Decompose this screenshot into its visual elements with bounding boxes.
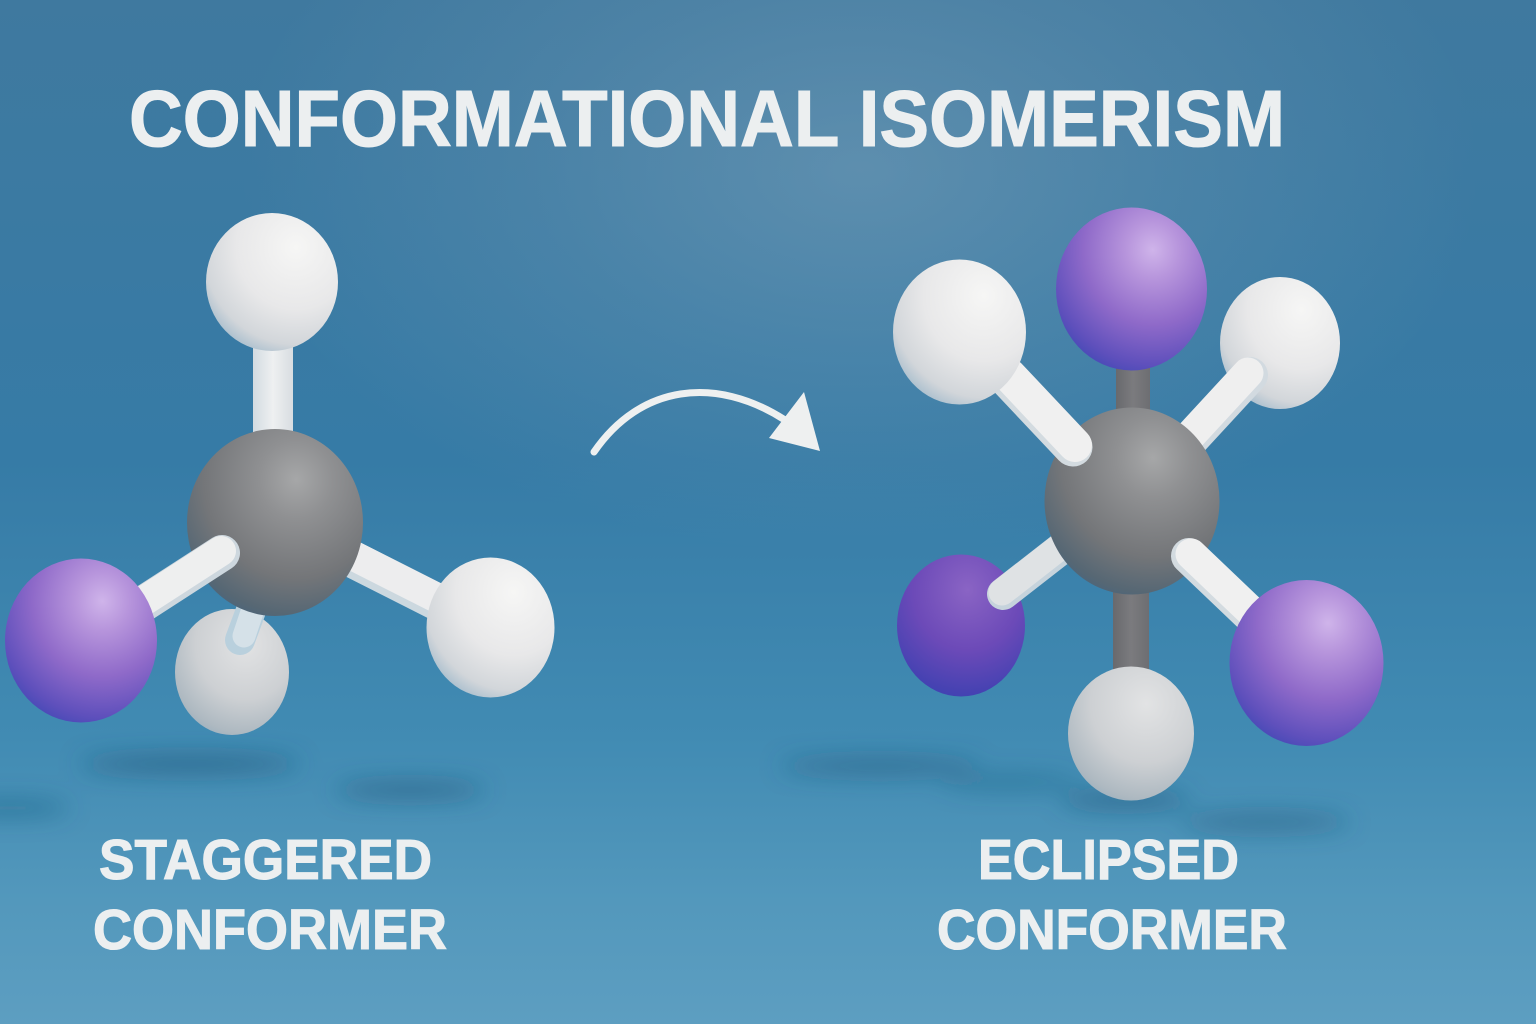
atom: upper-left hydrogen xyxy=(893,260,1026,404)
bond: lower-left xyxy=(1002,546,1062,594)
bond: rear xyxy=(240,603,255,640)
label: staggered conformer: CONFORMER xyxy=(93,898,447,962)
bond: upper-right xyxy=(1188,373,1250,440)
molecule: eclipsed conformer xyxy=(780,208,1384,830)
shadow: staggered molecule xyxy=(0,755,485,816)
atom: bottom hydrogen xyxy=(1068,666,1194,800)
bond: upper-left xyxy=(1007,375,1075,447)
bond: rear top xyxy=(1116,360,1150,420)
atom: top hydrogen xyxy=(206,213,338,351)
shadow: eclipsed molecule xyxy=(780,758,1350,830)
atom: rear hydrogen xyxy=(175,609,289,735)
atom: lower-right purple xyxy=(1230,580,1384,746)
atom: right hydrogen xyxy=(426,558,554,698)
atom: lower-left purple xyxy=(897,554,1025,696)
label: eclipsed conformer xyxy=(937,828,1287,962)
label: eclipsed conformer: CONFORMER xyxy=(937,898,1287,962)
arrow xyxy=(594,392,820,452)
molecule: staggered conformer xyxy=(0,213,554,816)
label: staggered conformer: STAGGERED xyxy=(99,828,432,892)
atom: top purple xyxy=(1056,208,1207,370)
bond: lower-right xyxy=(1189,554,1256,618)
bond: left xyxy=(139,551,222,606)
atom: carbon xyxy=(187,429,363,616)
label: staggered conformer xyxy=(93,828,447,962)
label: eclipsed conformer: ECLIPSED xyxy=(978,828,1239,892)
atom: carbon xyxy=(1044,408,1220,594)
bond: right xyxy=(350,555,439,602)
atom: left purple xyxy=(5,558,157,722)
title: CONFORMATIONAL ISOMERISM xyxy=(129,74,1285,163)
bond: bottom xyxy=(1113,585,1149,675)
bond: top xyxy=(253,340,293,440)
atom: upper-right hydrogen xyxy=(1220,277,1340,409)
